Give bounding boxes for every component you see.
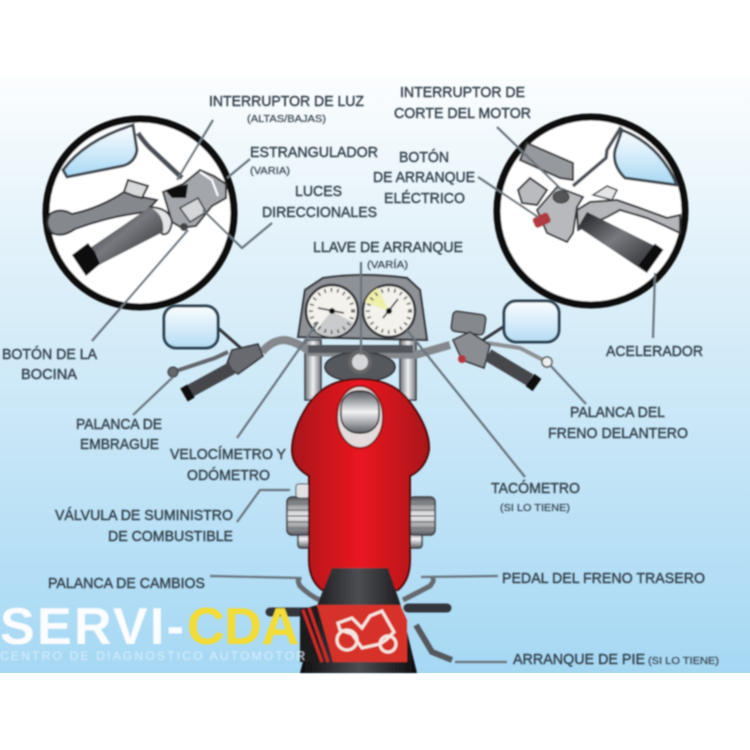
label: estrangulador: (VARIA)	[250, 166, 290, 177]
background panel	[0, 76, 750, 673]
label: válvula de suministro de combustible	[55, 507, 233, 545]
fuel tank	[292, 379, 429, 590]
speedometer gauge	[306, 285, 358, 337]
label: arranque de pie	[513, 651, 719, 668]
panel: left control detail circle	[46, 119, 234, 307]
label: tacómetro: (SI LO TIENE)	[500, 503, 570, 514]
label: palanca del freno delantero: FRENO DELANTERO	[548, 425, 688, 442]
diagram wrapper	[0, 84, 719, 673]
right mirror	[483, 301, 559, 342]
watermark: servi-cda logo text: CENTRO DE DIAGNOSTICO AUTOMOTOR	[0, 649, 305, 663]
label: velocímetro y odómetro: ODÓMETRO	[187, 467, 270, 484]
seat	[300, 568, 417, 673]
watermark: servi-cda logo text: SERVI-	[0, 598, 184, 656]
fuel cap	[337, 386, 383, 448]
label: velocímetro y odómetro	[170, 446, 286, 484]
logo: red tail plate with motorcycle icon	[300, 605, 407, 662]
label: interruptor de corte del motor: INTERRUPTOR DE	[400, 84, 525, 101]
handlebar	[262, 340, 450, 355]
label: velocímetro y odómetro: VELOCÍMETRO Y	[170, 446, 286, 463]
label: botón de arranque eléctrico: BOTÓN	[399, 149, 449, 166]
label: llave de arranque: LLAVE DE ARRANQUE	[313, 239, 463, 256]
label: interruptor de luz: (ALTAS/BAJAS)	[247, 114, 326, 125]
label: botón de arranque eléctrico: ELÉCTRICO	[384, 190, 465, 207]
label: válvula de suministro de combustible: DE COMBUSTIBLE	[108, 528, 233, 545]
leader lines	[92, 120, 655, 662]
label: palanca de embrague: PALANCA DE	[76, 416, 162, 433]
label: botón de la bocina	[2, 346, 97, 383]
label: botón de arranque eléctrico: DE ARRANQUE	[373, 169, 475, 186]
label: arranque de pie: ARRANQUE DE PIE	[513, 651, 645, 668]
label: válvula de suministro de combustible: VÁLVULA DE SUMINISTRO	[55, 507, 233, 524]
foot controls	[270, 580, 452, 660]
label: palanca de embrague: EMBRAGUE	[80, 436, 159, 453]
cylinder fins	[287, 497, 435, 548]
label: botón de arranque eléctrico	[373, 149, 475, 207]
watermark: servi-cda logo text	[0, 598, 305, 663]
label: acelerador: ACELERADOR	[606, 343, 703, 360]
label: palanca de embrague	[76, 416, 162, 453]
right grip, brake lever and master cylinder	[451, 311, 552, 385]
label: interruptor de corte del motor: CORTE DEL MOTOR	[394, 105, 531, 122]
watermark: servi-cda logo text: CDA	[187, 598, 299, 656]
panel: right control detail circle	[497, 117, 685, 305]
label: interruptor de luz	[209, 93, 364, 125]
label: llave de arranque: (VARÍA)	[367, 258, 408, 271]
label: palanca del freno delantero: PALANCA DEL	[570, 404, 665, 421]
label: arranque de pie: (SI LO TIENE)	[648, 656, 719, 667]
label: luces direccionales	[262, 183, 377, 221]
tachometer gauge	[363, 285, 415, 337]
fork tubes	[305, 340, 416, 400]
label: pedal del freno trasero: PEDAL DEL FRENO TRASERO	[502, 570, 705, 587]
label: luces direccionales: LUCES	[295, 183, 342, 200]
label: estrangulador	[250, 144, 378, 177]
ignition lock	[308, 345, 413, 382]
label: interruptor de corte del motor	[394, 84, 531, 122]
label: botón de la bocina: BOTÓN DE LA	[2, 346, 97, 363]
label: tacómetro	[491, 480, 580, 514]
label: tacómetro: TACÓMETRO	[491, 480, 580, 497]
instrument housing	[298, 275, 427, 340]
label: palanca de cambios: PALANCA DE CAMBIOS	[48, 575, 205, 592]
label: interruptor de luz: INTERRUPTOR DE LUZ	[209, 93, 364, 110]
left grip and clutch lever	[168, 344, 263, 395]
left mirror	[164, 306, 243, 350]
label: luces direccionales: DIRECCIONALES	[262, 204, 377, 221]
label: botón de la bocina: BOCINA	[21, 366, 77, 383]
label: llave de arranque	[313, 239, 463, 271]
label: palanca del freno delantero	[548, 404, 688, 442]
label: estrangulador: ESTRANGULADOR	[250, 144, 378, 161]
fuel valve	[296, 484, 310, 498]
